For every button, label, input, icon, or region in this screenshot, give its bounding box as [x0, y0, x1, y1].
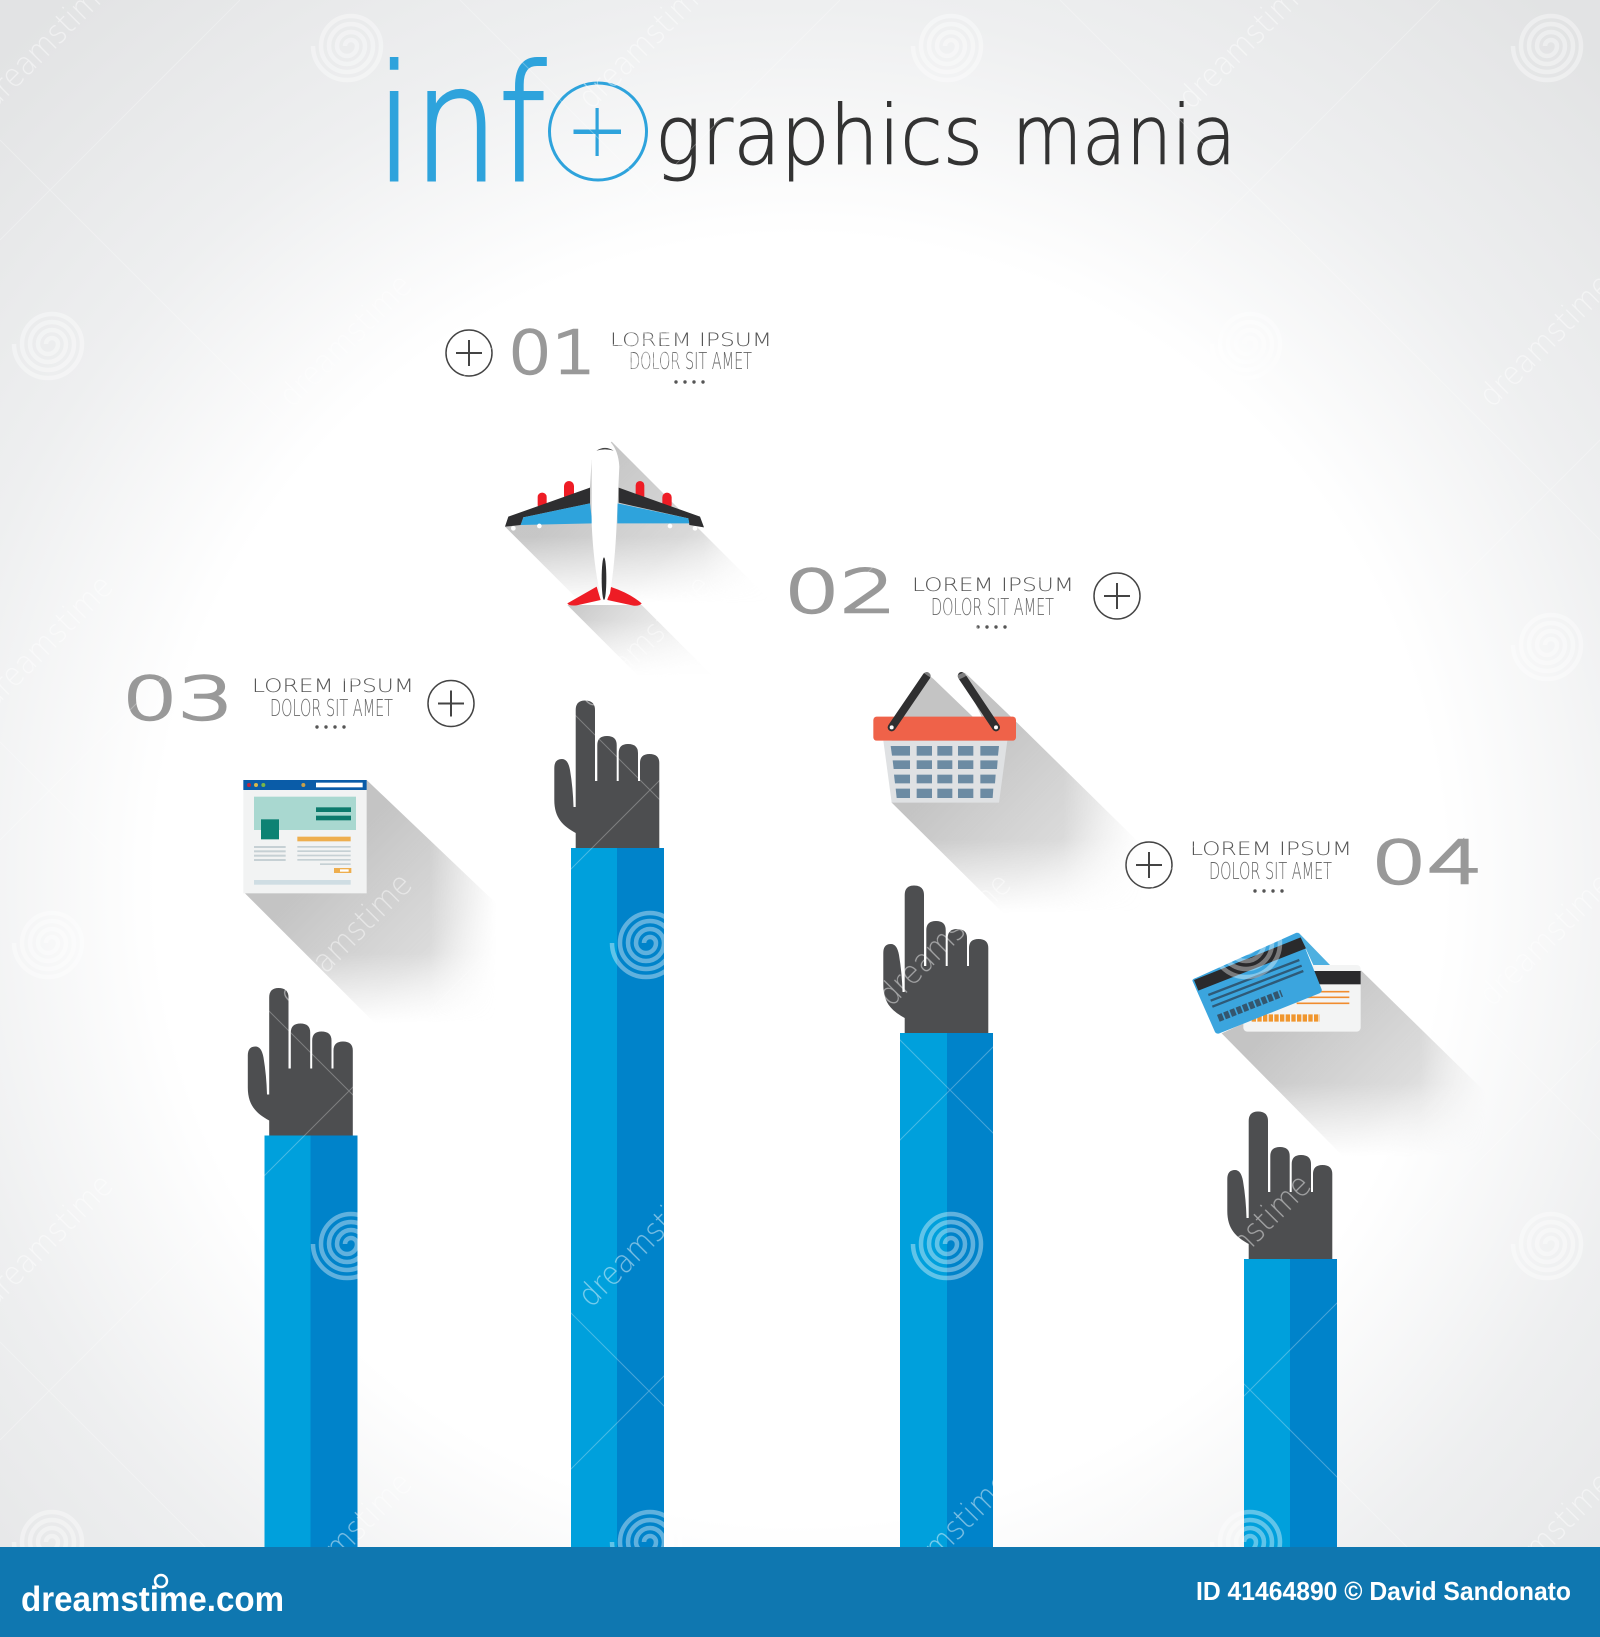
- footer bar: [0, 1547, 1600, 1637]
- footer credit: ID 41464890 © David Sandonato: [1196, 1576, 1571, 1606]
- icon: footer logo spiral: [155, 1575, 167, 1587]
- panel: item 04 label: [1126, 828, 1483, 897]
- dots 01: [674, 380, 705, 384]
- heading: lorem ipsum 03: LOREM IPSUM: [252, 675, 414, 697]
- title word: graphics: graphics: [655, 89, 983, 184]
- watermark spirals and text: dreamstime: [271, 1464, 419, 1612]
- dots 03: [315, 725, 346, 729]
- icon: airplane: [505, 442, 729, 656]
- icon: plus circle 04: [1126, 842, 1172, 888]
- text: dolor sit amet 02: DOLOR SIT AMET: [931, 595, 1054, 621]
- watermark spirals and text: dreamstime: [870, 1464, 1018, 1612]
- watermark spirals and text: dreamstime: [1170, 567, 1318, 715]
- icon: plus circle 01: [446, 330, 492, 376]
- heading: lorem ipsum 02: LOREM IPSUM: [912, 574, 1074, 596]
- title word: info: inf: [376, 31, 546, 218]
- arm 1: bar and hand: [248, 988, 358, 1548]
- dots 04: [1253, 889, 1284, 893]
- arm 3: bar and hand: [883, 886, 993, 1547]
- icon: browser window: [243, 780, 482, 1008]
- number 01: 01: [508, 318, 596, 387]
- number 04: 04: [1371, 828, 1483, 897]
- watermark spirals and text: dreamstime: [870, 266, 1018, 414]
- icon: shopping basket: [873, 672, 1132, 897]
- panel: item 01 label: [446, 318, 772, 387]
- icon: plus circle 02: [1094, 573, 1140, 619]
- footer logo text: dreamstime.com: [21, 1580, 284, 1619]
- text: dolor sit amet 04: DOLOR SIT AMET: [1209, 859, 1332, 885]
- number 02: 02: [784, 557, 896, 626]
- panel: item 03 label: [122, 664, 474, 733]
- watermark spirals and text: dreamstime: [870, 865, 1018, 1013]
- watermark spirals and text: dreamstime: [570, 1166, 718, 1314]
- watermark spirals and text: dreamstime: [1170, 1166, 1318, 1314]
- watermark spirals and text: dreamstime: [271, 865, 419, 1013]
- text: dolor sit amet 01: DOLOR SIT AMET: [629, 349, 752, 375]
- title: [376, 31, 1236, 218]
- heading: lorem ipsum 01: LOREM IPSUM: [610, 329, 772, 351]
- panel: item 02 label: [784, 557, 1140, 629]
- icon: plus circle 03: [428, 680, 474, 726]
- arm 2: bar and hand: [554, 700, 664, 1547]
- heading: lorem ipsum 04: LOREM IPSUM: [1190, 838, 1352, 860]
- arm 4: bar and hand: [1227, 1112, 1337, 1547]
- icon: credit cards: [1192, 932, 1464, 1141]
- number 03: 03: [122, 664, 234, 733]
- watermark spirals and text: dreamstime: [271, 266, 419, 414]
- text: dolor sit amet 03: DOLOR SIT AMET: [270, 696, 393, 722]
- title word: mania: mania: [1012, 89, 1236, 184]
- watermark spirals and text: dreamstime: [570, 567, 718, 715]
- dots 02: [976, 625, 1007, 629]
